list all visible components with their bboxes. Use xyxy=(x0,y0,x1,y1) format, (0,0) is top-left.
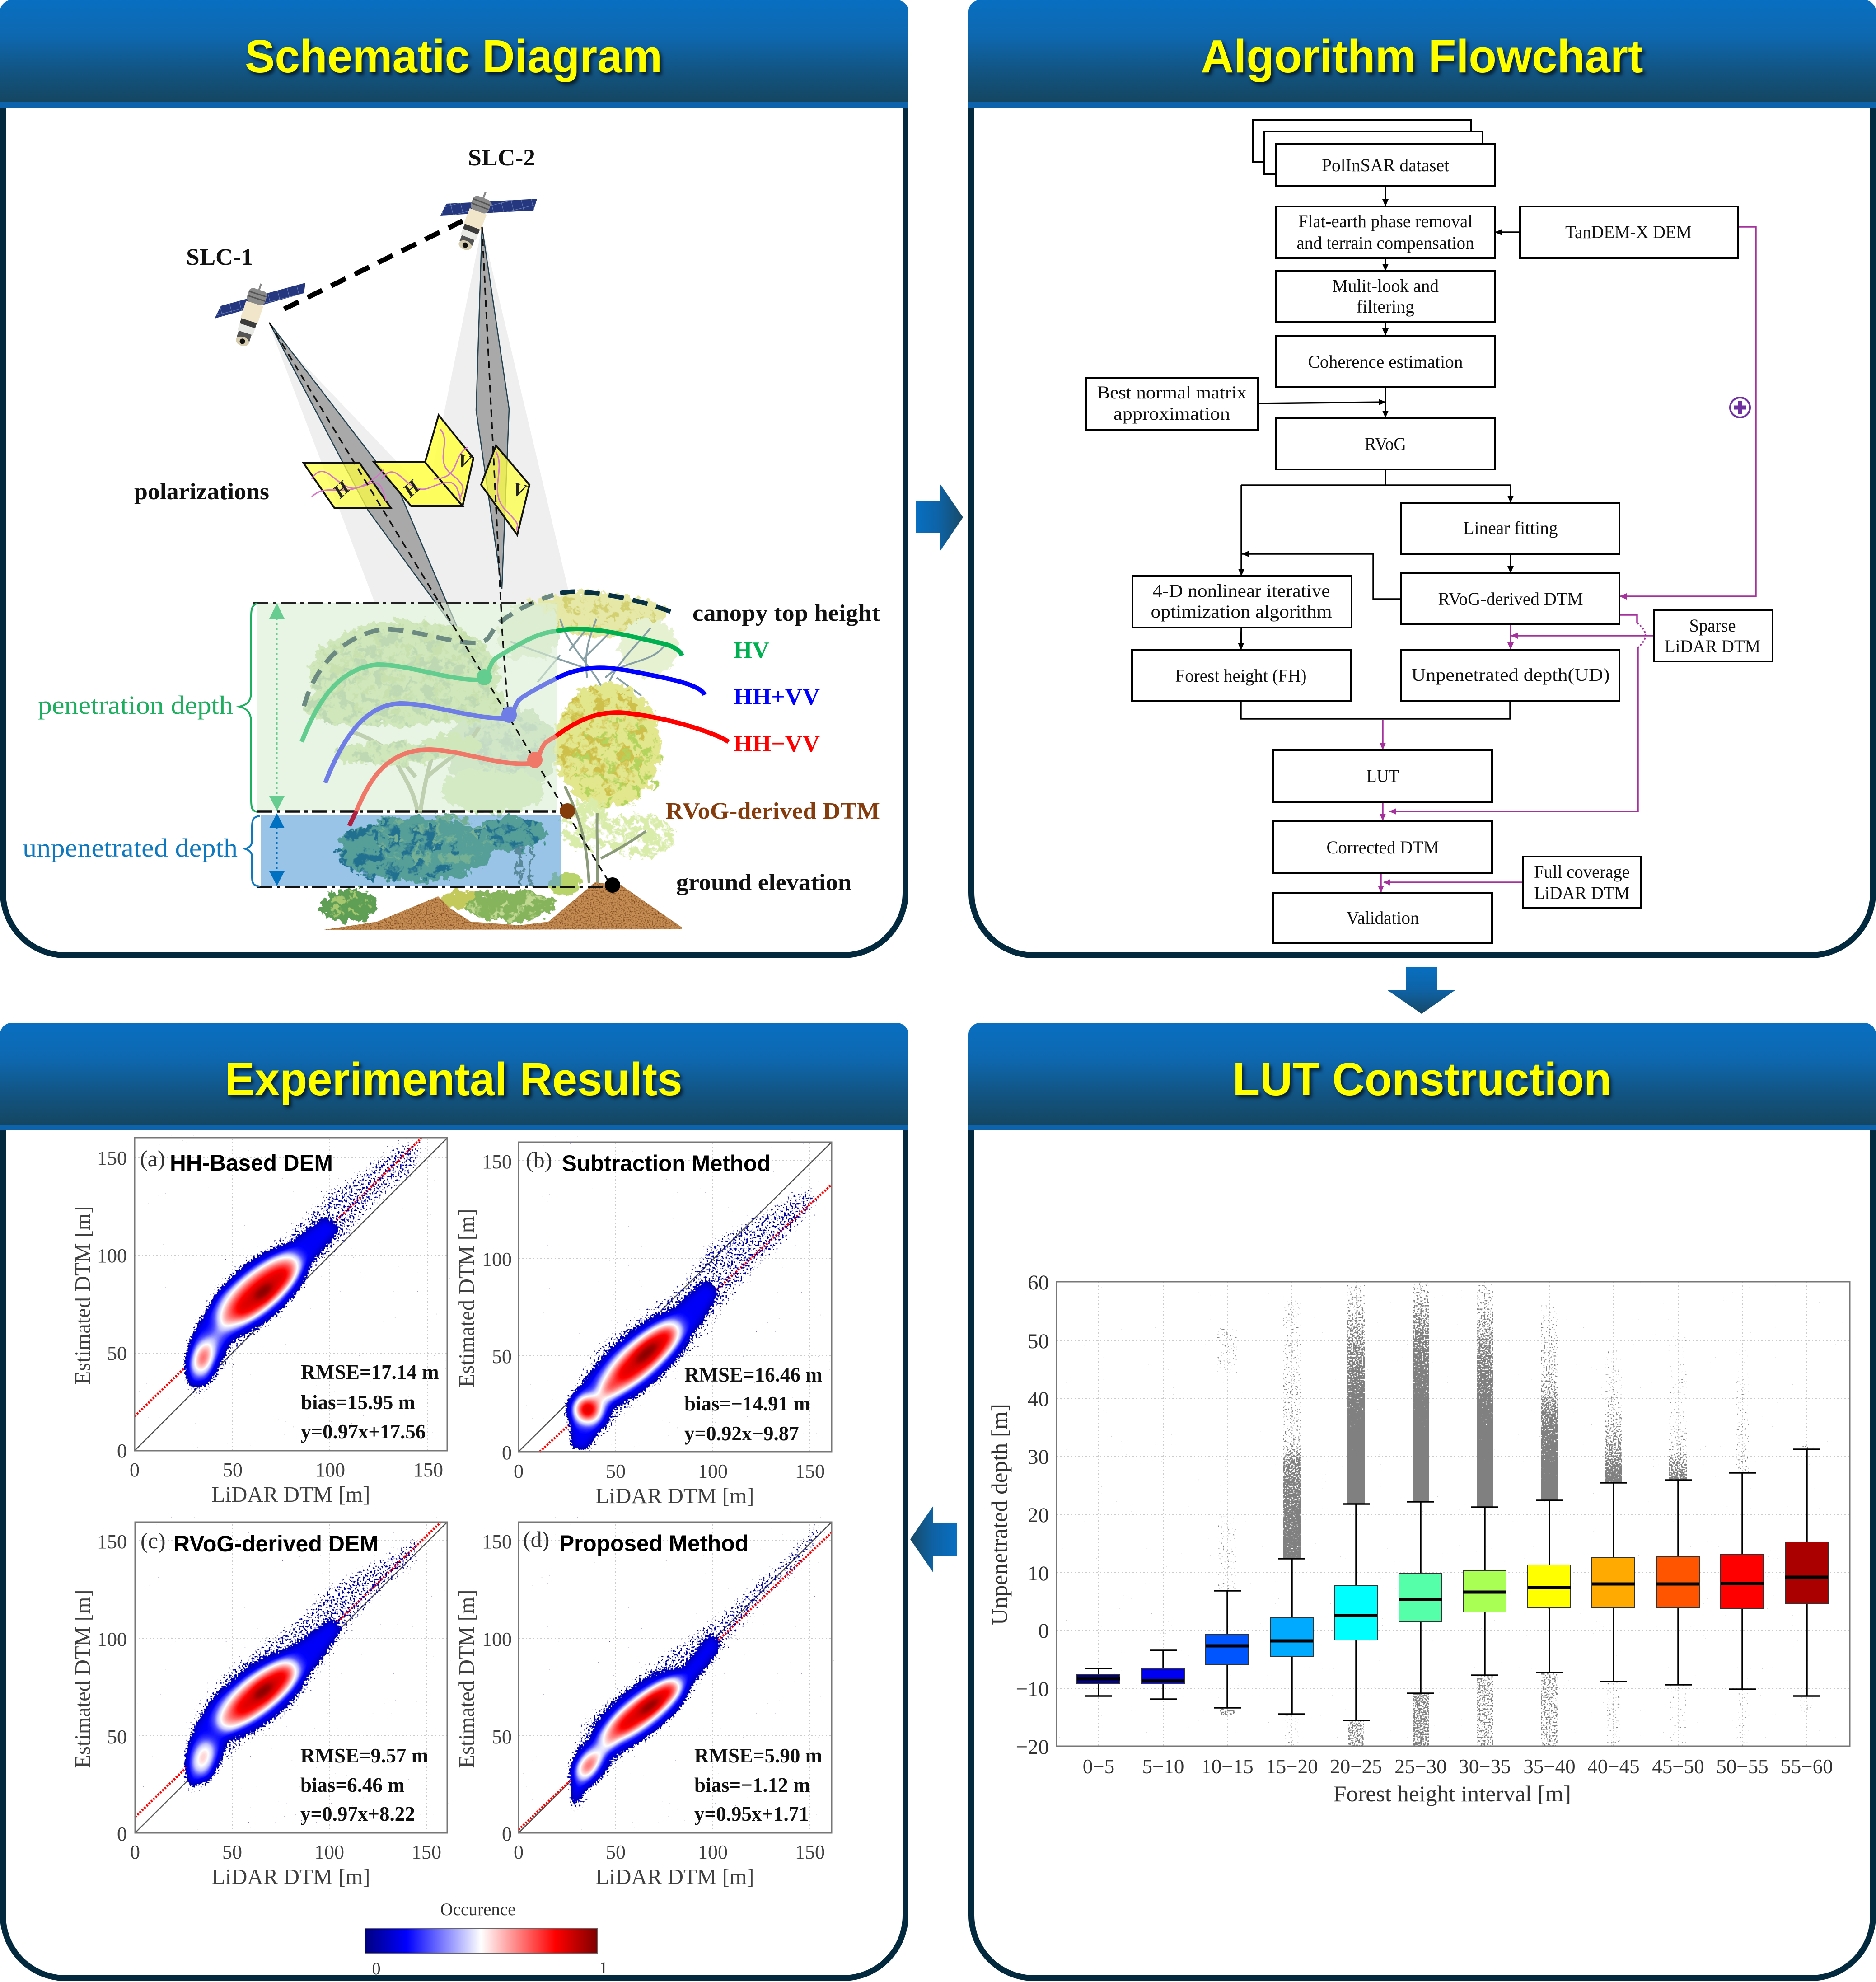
header: schematic diagram xyxy=(0,0,908,108)
box LUT xyxy=(1273,750,1492,802)
polarization letters: H xyxy=(329,477,355,503)
y ticks b: 150 xyxy=(482,1151,512,1173)
light radar cones xyxy=(271,227,571,603)
y ticks b xyxy=(482,1151,512,1464)
y ticks b: 0 xyxy=(502,1442,512,1464)
y ticks c: 0 xyxy=(117,1823,127,1845)
depth arrows xyxy=(269,603,285,886)
x ticks b: 0 xyxy=(514,1460,524,1482)
label SLC-1: SLC-1 xyxy=(186,244,253,270)
label RVoG-derived DTM: RVoG-derived DTM xyxy=(665,798,880,824)
header: experimental results: Experimental Results xyxy=(225,1053,682,1105)
box PolInSAR dataset: PolInSAR dataset xyxy=(1322,155,1449,175)
y ticks d: 0 xyxy=(502,1823,512,1845)
box linear fitting xyxy=(1401,503,1619,554)
tree: yellow right tree xyxy=(553,683,674,883)
x ticks c: 100 xyxy=(314,1841,344,1863)
colorbar legend: 1 xyxy=(599,1959,608,1977)
stats c: RMSE=9.57 m xyxy=(300,1744,428,1767)
title a: HH-Based DEM xyxy=(170,1150,333,1176)
box forest height: Forest height (FH) xyxy=(1175,665,1306,686)
title b: Subtraction Method xyxy=(562,1151,771,1176)
title d: Proposed Method xyxy=(559,1531,749,1556)
y ticks c: 50 xyxy=(107,1726,127,1748)
x ticks b: 150 xyxy=(795,1460,825,1482)
plot frame xyxy=(1057,1282,1850,1746)
panel: LUT construction xyxy=(968,1023,1876,1978)
y axis ticks: 20 xyxy=(1028,1504,1049,1527)
box RVoG xyxy=(1276,418,1495,469)
y ticks a xyxy=(97,1147,127,1462)
box PolInSAR dataset xyxy=(1276,144,1495,186)
box 4-D nonlinear: 4-D nonlinear iterative xyxy=(1153,581,1330,601)
box multi-look: Mulit-look and xyxy=(1332,276,1439,296)
x ticks c: 50 xyxy=(222,1841,242,1863)
penetration depth band xyxy=(257,603,557,811)
x axis ticks: 20−25 xyxy=(1330,1755,1382,1778)
x axis ticks: 25−30 xyxy=(1394,1755,1447,1778)
x ticks b: 50 xyxy=(606,1460,626,1482)
y ticks b: 100 xyxy=(482,1248,512,1270)
y ticks a: 50 xyxy=(107,1342,127,1364)
x ticks d: 50 xyxy=(606,1841,626,1863)
tree: bare branches with light canopy xyxy=(497,593,678,696)
y ticks b: 50 xyxy=(492,1345,512,1368)
colorbar legend: Occurence xyxy=(440,1900,516,1919)
stats a: RMSE=17.14 m xyxy=(301,1361,439,1383)
x axis ticks: 5−10 xyxy=(1142,1755,1184,1778)
box RVoG-derived DTM xyxy=(1401,573,1619,624)
box 4-D nonlinear xyxy=(1132,576,1352,628)
box RVoG-derived DTM: RVoG-derived DTM xyxy=(1438,589,1583,609)
stats a: bias=15.95 m xyxy=(301,1391,415,1414)
x ticks d: 0 xyxy=(514,1841,524,1863)
box best normal matrix: approximation xyxy=(1113,403,1230,424)
label HV: HV xyxy=(734,637,769,663)
box flat-earth xyxy=(1276,206,1495,258)
scatter plot d xyxy=(454,1522,832,1889)
y axis ticks: 0 xyxy=(1038,1619,1049,1643)
stats a xyxy=(301,1361,439,1443)
stats b: RMSE=16.46 m xyxy=(684,1364,823,1386)
boxes xyxy=(1077,1542,1828,1683)
y ticks c: 150 xyxy=(97,1531,127,1553)
title c: (c) xyxy=(140,1528,165,1553)
label SLC-2: SLC-2 xyxy=(468,145,535,171)
label HH-VV: HH−VV xyxy=(734,731,820,757)
arrow: schematic to flowchart xyxy=(916,484,963,551)
header: algorithm flowchart: Algorithm Flowchart xyxy=(1201,30,1643,82)
y axis label: Unpenetrated depth [m] xyxy=(987,1404,1012,1625)
x ticks a: 0 xyxy=(130,1459,140,1481)
x ticks c xyxy=(130,1841,441,1863)
arrow: flowchart to LUT xyxy=(1388,967,1455,1014)
HH-VV curve xyxy=(349,712,729,826)
y label b: Estimated DTM [m] xyxy=(454,1209,479,1387)
y ticks c xyxy=(97,1531,127,1845)
canopy top height curve xyxy=(304,591,678,706)
box unpenetrated depth xyxy=(1401,650,1619,701)
box best normal matrix xyxy=(1086,378,1258,430)
y label c: Estimated DTM [m] xyxy=(70,1589,95,1768)
y ticks c: 100 xyxy=(97,1628,127,1650)
box corrected DTM xyxy=(1273,821,1492,873)
label unpenetrated depth: unpenetrated depth xyxy=(23,833,238,862)
title c: RVoG-derived DEM xyxy=(173,1531,379,1556)
HH+VV curve xyxy=(325,668,705,783)
box TanDEM-X DEM: TanDEM-X DEM xyxy=(1565,222,1692,242)
polarization plates xyxy=(304,415,529,535)
y ticks a: 150 xyxy=(97,1147,127,1169)
header: LUT construction: LUT Construction xyxy=(1232,1053,1612,1105)
plot grid xyxy=(1057,1282,1850,1746)
x ticks a: 100 xyxy=(315,1459,345,1481)
x axis ticks: 30−35 xyxy=(1459,1755,1511,1778)
x ticks a: 50 xyxy=(223,1459,243,1481)
box 4-D nonlinear: optimization algorithm xyxy=(1151,601,1332,622)
x axis ticks: 15−20 xyxy=(1266,1755,1318,1778)
box validation: Validation xyxy=(1346,908,1419,928)
stats d: RMSE=5.90 m xyxy=(694,1744,822,1767)
title a: (a) xyxy=(140,1146,165,1171)
medians xyxy=(1077,1577,1828,1681)
stacked dataset boxes xyxy=(1253,120,1483,174)
x axis ticks xyxy=(1083,1755,1833,1778)
arrow: LUT to results xyxy=(910,1506,957,1573)
y axis ticks xyxy=(1015,1271,1049,1759)
x ticks d: 100 xyxy=(698,1841,728,1863)
x ticks d xyxy=(514,1841,825,1863)
x axis ticks: 40−45 xyxy=(1587,1755,1640,1778)
tree: pale back tree xyxy=(440,705,558,813)
baseline between satellites xyxy=(284,221,463,309)
label ground elevation: ground elevation xyxy=(676,870,851,895)
scatter phase center lines xyxy=(269,227,611,885)
tree: understory blue green xyxy=(337,813,547,883)
colorbar legend xyxy=(365,1900,608,1978)
x label b: LiDAR DTM [m] xyxy=(595,1483,754,1508)
trees xyxy=(305,593,678,922)
scatter plot b xyxy=(454,1142,832,1508)
header: experimental results xyxy=(0,1023,908,1130)
box unpenetrated depth: Unpenetrated depth(UD) xyxy=(1411,665,1610,685)
stats c: y=0.97x+8.22 xyxy=(300,1803,415,1825)
stats c: bias=6.46 m xyxy=(300,1774,405,1796)
whiskers xyxy=(1085,1449,1820,1720)
box flat-earth: and terrain compensation xyxy=(1296,233,1474,253)
reference lines xyxy=(253,603,608,887)
box linear fitting: Linear fitting xyxy=(1464,518,1558,538)
y axis ticks: 60 xyxy=(1028,1271,1049,1294)
x axis ticks: 50−55 xyxy=(1716,1755,1768,1778)
y ticks d: 50 xyxy=(492,1726,512,1748)
x ticks a: 150 xyxy=(413,1459,443,1481)
unpenetrated depth band xyxy=(261,815,561,886)
box sparse LiDAR: LiDAR DTM xyxy=(1665,636,1760,656)
panel: schematic diagram xyxy=(0,0,908,956)
y ticks a: 100 xyxy=(97,1245,127,1267)
box full coverage LiDAR: LiDAR DTM xyxy=(1534,883,1630,903)
y axis ticks: 40 xyxy=(1028,1387,1049,1411)
colorbar legend: 0 xyxy=(372,1959,380,1978)
y ticks a: 0 xyxy=(117,1440,127,1462)
box RVoG: RVoG xyxy=(1365,434,1406,454)
beam SLC-1 xyxy=(269,323,463,640)
scatter plot a xyxy=(70,1138,447,1507)
x axis ticks: 0−5 xyxy=(1083,1755,1114,1778)
x label a: LiDAR DTM [m] xyxy=(211,1482,370,1507)
satellite SLC-2 xyxy=(440,188,537,253)
box flat-earth: Flat-earth phase removal xyxy=(1298,211,1473,231)
box forest height xyxy=(1132,650,1351,701)
polarization letters xyxy=(329,450,529,503)
box TanDEM-X DEM xyxy=(1520,206,1738,258)
y axis ticks: −10 xyxy=(1015,1677,1049,1701)
y ticks d xyxy=(482,1531,512,1845)
y label d: Estimated DTM [m] xyxy=(454,1589,479,1768)
scatter plot c xyxy=(70,1522,447,1889)
box multi-look xyxy=(1276,271,1495,322)
header: LUT construction xyxy=(968,1023,1876,1130)
HV curve xyxy=(302,629,682,742)
label penetration depth: penetration depth xyxy=(38,690,233,720)
box LUT: LUT xyxy=(1366,766,1399,786)
label polarizations: polarizations xyxy=(134,479,269,505)
y ticks d: 150 xyxy=(482,1531,512,1553)
x label d: LiDAR DTM [m] xyxy=(595,1864,754,1889)
panel: algorithm flowchart xyxy=(968,0,1876,956)
ground elevation point xyxy=(605,877,620,893)
bushes xyxy=(321,872,580,922)
y ticks d: 100 xyxy=(482,1628,512,1650)
x axis label: Forest height interval [m] xyxy=(1333,1781,1571,1806)
box validation xyxy=(1273,893,1492,943)
icon: plus fusion xyxy=(1730,398,1750,417)
x axis ticks: 55−60 xyxy=(1781,1755,1833,1778)
box sparse LiDAR: Sparse xyxy=(1689,615,1736,636)
outlier speckle xyxy=(1159,1283,1814,1746)
stats d: y=0.95x+1.71 xyxy=(694,1803,809,1825)
y axis ticks: 30 xyxy=(1028,1445,1049,1469)
x ticks c: 0 xyxy=(130,1841,140,1863)
stats b: y=0.92x−9.87 xyxy=(684,1422,799,1445)
x axis ticks: 10−15 xyxy=(1201,1755,1254,1778)
unpenetrated depth brace xyxy=(245,816,260,886)
title b: (b) xyxy=(526,1147,552,1172)
label HH+VV: HH+VV xyxy=(734,684,820,710)
box plot chart xyxy=(987,1271,1850,1806)
stats b: bias=−14.91 m xyxy=(684,1392,810,1415)
tree: left green tree xyxy=(305,620,506,813)
x ticks c: 150 xyxy=(412,1841,441,1863)
panel: experimental results xyxy=(0,1023,908,1978)
stats d xyxy=(694,1744,822,1825)
x axis ticks: 45−50 xyxy=(1652,1755,1704,1778)
box coherence: Coherence estimation xyxy=(1308,351,1463,372)
stats d: bias=−1.12 m xyxy=(694,1774,810,1796)
box corrected DTM: Corrected DTM xyxy=(1326,837,1439,857)
x label c: LiDAR DTM [m] xyxy=(211,1864,370,1889)
beam SLC-2 xyxy=(476,227,509,589)
x ticks a xyxy=(130,1459,443,1481)
satellite SLC-1 xyxy=(215,281,305,348)
x axis ticks: 35−40 xyxy=(1523,1755,1576,1778)
header: schematic diagram: Schematic Diagram xyxy=(245,30,662,82)
box coherence xyxy=(1276,336,1495,387)
stats b xyxy=(684,1364,823,1445)
stats a: y=0.97x+17.56 xyxy=(301,1420,426,1443)
box sparse LiDAR xyxy=(1654,610,1773,661)
purple connectors xyxy=(1381,227,1756,892)
polarization letters: H xyxy=(399,476,425,502)
polarization letters: V xyxy=(455,450,474,473)
penetration depth brace xyxy=(239,603,257,812)
y label a: Estimated DTM [m] xyxy=(70,1206,95,1384)
stats c xyxy=(300,1744,428,1825)
RVoG-derived DTM point xyxy=(560,803,575,819)
box full coverage LiDAR: Full coverage xyxy=(1534,862,1630,882)
x ticks b xyxy=(514,1460,825,1482)
x ticks d: 150 xyxy=(795,1841,825,1863)
box full coverage LiDAR xyxy=(1523,857,1641,908)
box best normal matrix: Best normal matrix xyxy=(1097,382,1247,403)
y axis ticks: 50 xyxy=(1028,1330,1049,1353)
label canopy top height: canopy top height xyxy=(692,600,880,626)
ground xyxy=(324,882,682,930)
title d: (d) xyxy=(523,1527,549,1552)
x ticks b: 100 xyxy=(698,1460,728,1482)
box multi-look: filtering xyxy=(1357,296,1414,317)
y axis ticks: −20 xyxy=(1015,1735,1049,1759)
black connectors xyxy=(1241,186,1520,719)
polarization letters: V xyxy=(510,479,529,502)
y axis ticks: 10 xyxy=(1028,1562,1049,1585)
header: algorithm flowchart xyxy=(968,0,1876,108)
